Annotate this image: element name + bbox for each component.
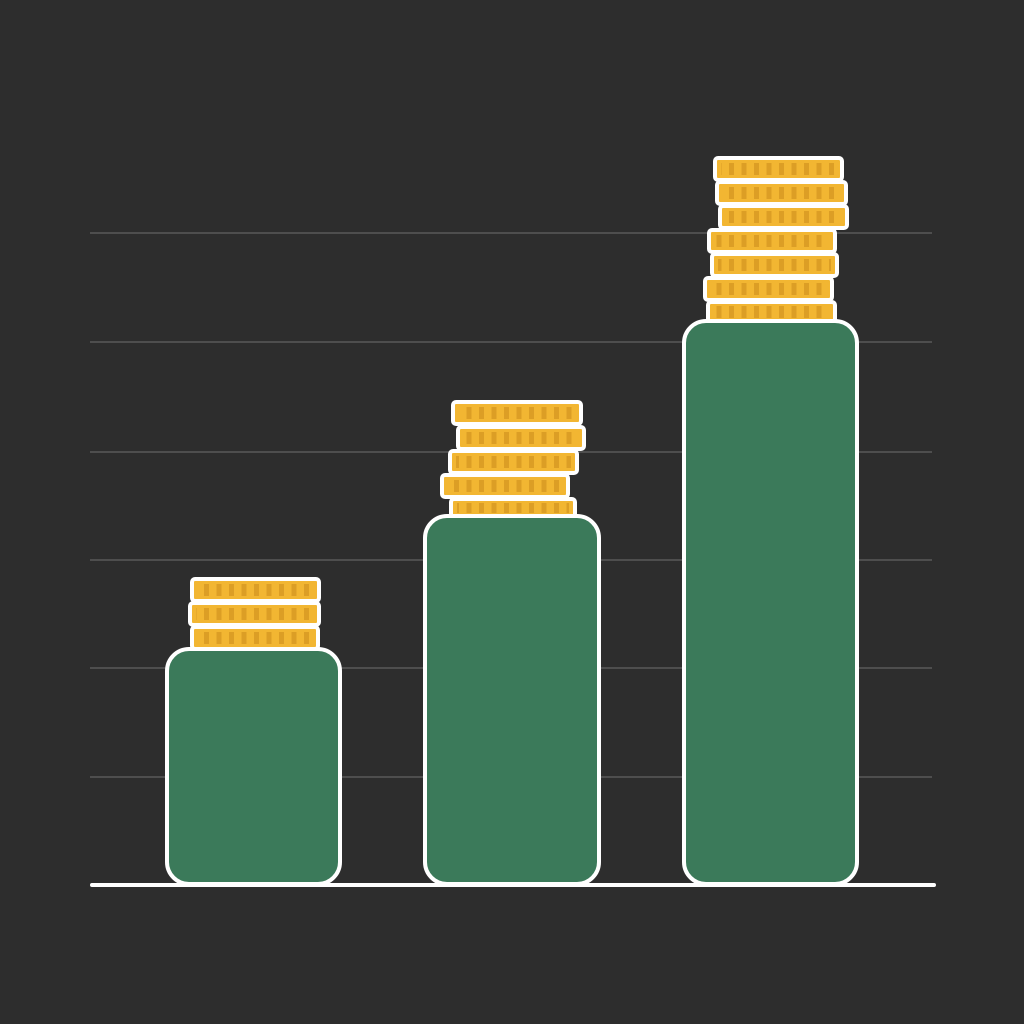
baseline axis — [92, 883, 934, 887]
bar 2 with coin stack — [425, 402, 599, 884]
bar 3 with coin stack — [684, 158, 857, 884]
bar 1 with coin stack — [167, 579, 340, 884]
